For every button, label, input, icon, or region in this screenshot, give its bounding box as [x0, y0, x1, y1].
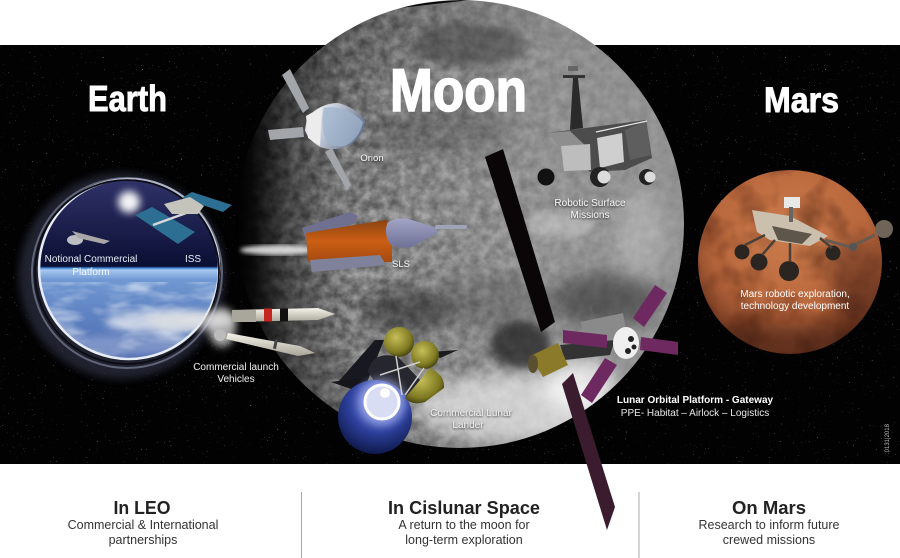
date stamp: .0131|2018	[885, 423, 891, 454]
panel: In Cislunar Space: In Cislunar Space	[388, 497, 540, 518]
space background	[0, 45, 900, 464]
dividers	[302, 492, 639, 558]
icon: lunar orbital platform gateway	[528, 285, 678, 403]
label: commercial lunar lander: Lander	[452, 420, 484, 431]
label: Orion: Orion	[360, 153, 384, 164]
icon: commercial rocket upper	[232, 308, 335, 322]
label: SLS: SLS	[392, 259, 410, 270]
label: lunar orbital platform gateway: Lunar Orbital Platform - Gateway	[617, 395, 774, 406]
heading: Mars: Mars	[764, 81, 839, 120]
icon: SLS rocket	[302, 212, 467, 272]
icon: Orion	[268, 69, 365, 190]
icon: Mars rover	[734, 197, 893, 281]
panel: In LEO: In LEO	[114, 497, 170, 518]
icon: robotic surface rover	[538, 66, 656, 187]
Earth porthole	[19, 173, 225, 379]
heading: Earth: Earth	[88, 78, 167, 119]
icon: gateway lower solar array	[562, 373, 615, 530]
label: Notional Commercial Platform	[45, 254, 137, 278]
label: commercial launch vehicles: Commercial launch	[193, 362, 279, 373]
panel: On Mars: Research to inform future	[698, 518, 840, 532]
label: Notional Commercial Platform: Notional Commercial	[45, 254, 137, 265]
icon: ISS	[135, 192, 232, 244]
icon: gateway upper solar array	[485, 149, 555, 332]
heading: Moon: Moon	[390, 57, 527, 124]
icon: notional commercial platform	[67, 231, 110, 245]
label: commercial lunar lander	[430, 408, 513, 431]
panel: In LEO: Commercial & International	[68, 518, 218, 532]
label: robotic surface missions: Missions	[571, 210, 609, 221]
label: ISS: ISS	[185, 254, 201, 265]
label: Mars robotic exploration	[740, 289, 850, 312]
panel: On Mars: On Mars	[732, 497, 806, 518]
moon	[236, 0, 684, 448]
label: robotic surface missions: Robotic Surface	[554, 198, 626, 209]
label: commercial launch vehicles	[193, 362, 279, 385]
label: lunar orbital platform gateway: PPE- Habitat – Airlock – Logistics	[621, 408, 769, 419]
icon: commercial rocket lower	[214, 329, 315, 356]
panel: In Cislunar Space: A return to the moon for	[398, 518, 530, 532]
label: Notional Commercial Platform: Platform	[72, 267, 110, 278]
label: commercial lunar lander: Commercial Lunar	[430, 408, 513, 419]
panel: In LEO: partnerships	[109, 533, 177, 547]
panel: In Cislunar Space	[388, 497, 540, 547]
label: robotic surface missions	[554, 198, 626, 221]
panel: In Cislunar Space: long-term exploration	[405, 533, 523, 547]
label: commercial launch vehicles: Vehicles	[217, 374, 255, 385]
panel: On Mars	[698, 497, 840, 547]
icon: commercial lunar lander	[331, 327, 458, 454]
label: Mars robotic exploration: Mars robotic exploration,	[740, 289, 850, 300]
launch vehicle exhaust	[145, 307, 236, 347]
panel: On Mars: crewed missions	[723, 533, 815, 547]
panel: In LEO	[68, 497, 218, 547]
label: lunar orbital platform gateway	[617, 395, 774, 419]
SLS exhaust	[240, 245, 316, 255]
label: Mars robotic exploration: technology development	[741, 301, 849, 312]
Mars planet	[698, 170, 882, 354]
